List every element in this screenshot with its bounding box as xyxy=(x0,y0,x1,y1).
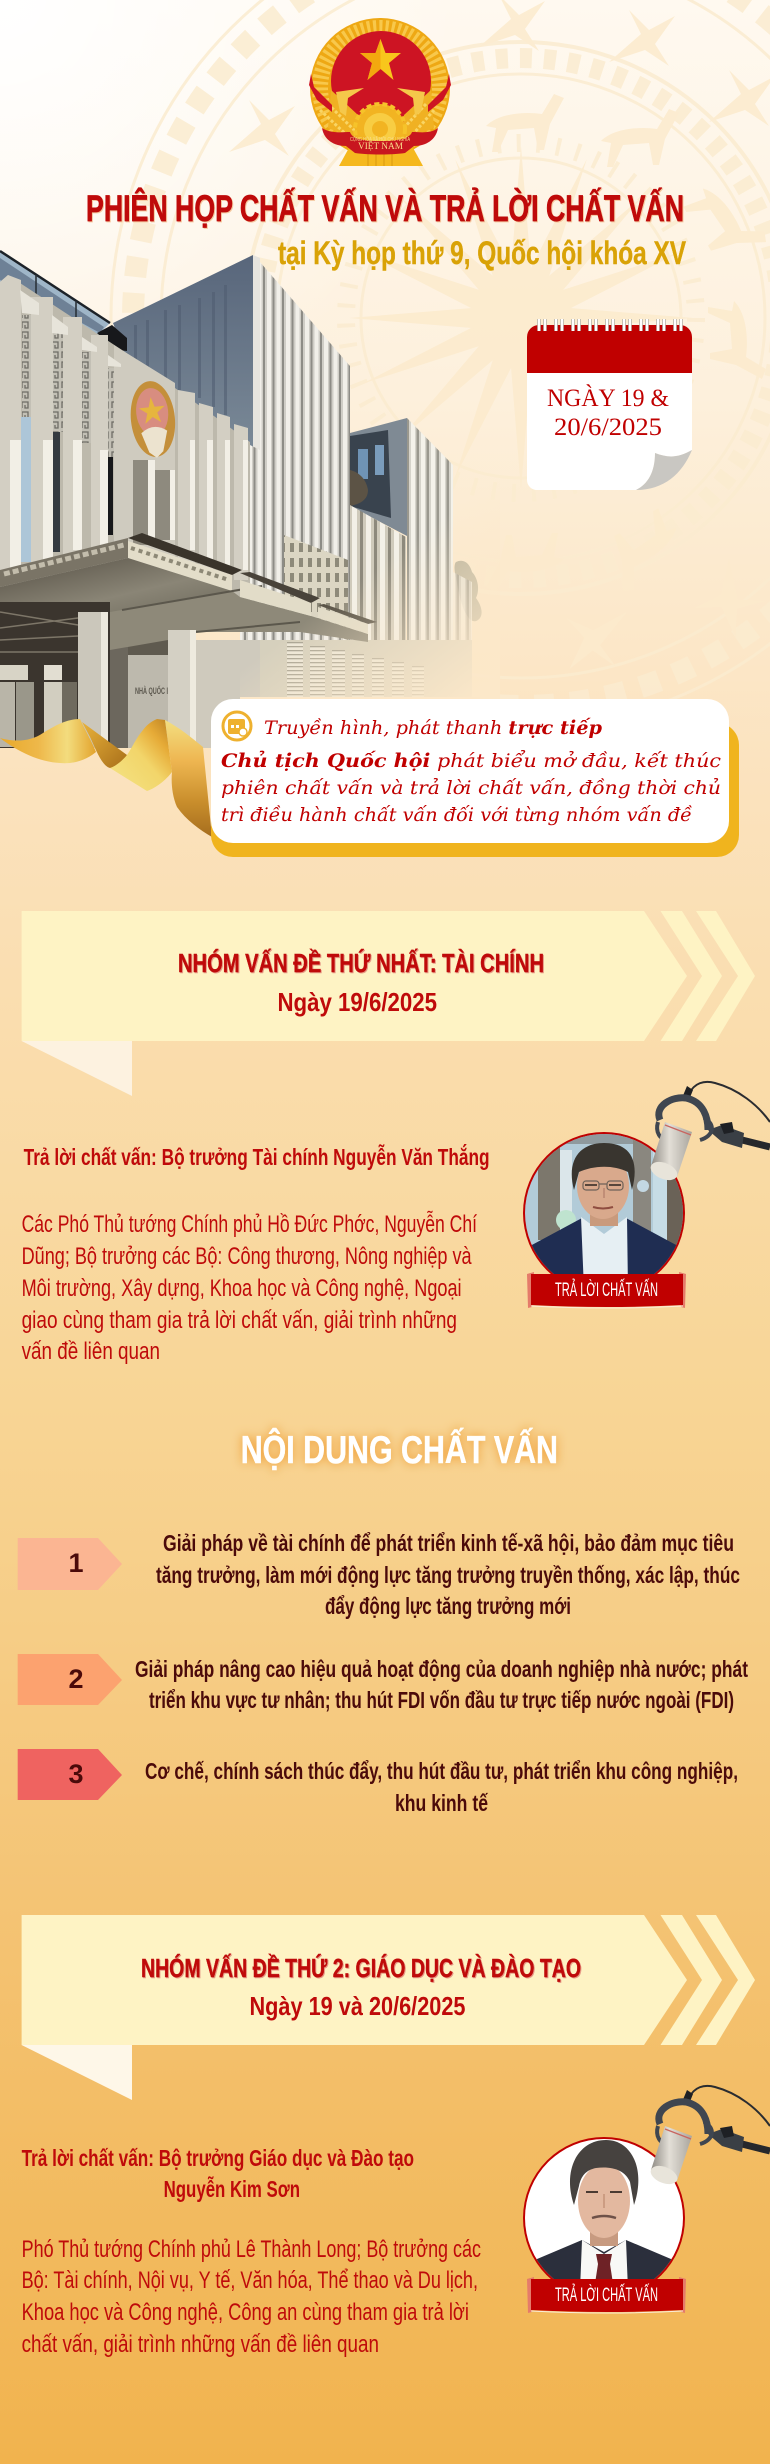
panel: group 1 banner xyxy=(22,911,755,1096)
text block: participants 2: Bộ: Tài chính, Nội vụ, Y tế, Văn hóa, Thể thao và Du lịch, xyxy=(22,2267,478,2294)
label: respondent 2 ribbon: TRẢ LỜI CHẤT VẤN xyxy=(555,2284,658,2306)
canopy left xyxy=(128,533,242,575)
pilasters xyxy=(0,275,21,600)
text block: participants 1: Các Phó Thủ tướng Chính phủ Hồ Đức Phớc, Nguyễn Chí xyxy=(22,1211,477,1238)
panel: group 2 banner xyxy=(22,1915,755,2100)
panel: group 2 banner: Ngày 19 và 20/6/2025 xyxy=(250,1991,466,2021)
text block: participants 1 xyxy=(22,1211,477,1365)
callout: live broadcast: phiên chất vấn và trả lời chất vấn, đồng thời chủ xyxy=(221,777,721,799)
portrait: Nguyễn Văn Thắng xyxy=(523,1132,685,1274)
list item 2: 2 xyxy=(68,1664,84,1694)
text block: participants 2: Phó Thủ tướng Chính phủ Lê Thành Long; Bộ trưởng các xyxy=(22,2236,481,2263)
canopy underside xyxy=(0,558,232,613)
panel: group 2 banner: NHÓM VẤN ĐỀ THỨ 2: GIÁO DỤC VÀ ĐÀO TẠO xyxy=(141,1953,581,1983)
panel: group 1 banner: Ngày 19/6/2025 xyxy=(278,987,437,1017)
calendar: 20/6/2025 xyxy=(554,414,662,441)
base with louvers xyxy=(240,640,472,700)
canopy middle and right xyxy=(240,572,320,603)
pilaster bright edges xyxy=(10,440,248,570)
gear xyxy=(355,104,405,154)
calendar: NGÀY 19 & xyxy=(547,384,669,412)
tower stripes xyxy=(240,262,350,640)
facade emblem xyxy=(127,379,179,460)
text block: participants 2: chất vấn, giải trình những vấn đề liên quan xyxy=(22,2331,379,2358)
callout: live broadcast: trì điều hành chất vấn đối với từng nhóm vấn đề xyxy=(221,804,692,826)
canopy underside right xyxy=(110,591,368,650)
list item 1 xyxy=(18,1530,740,1619)
text block: participants 2 xyxy=(22,2236,481,2358)
icon: microphone 1 xyxy=(648,1082,770,1184)
list item 3 xyxy=(18,1749,738,1816)
label: respondent 1 ribbon: TRẢ LỜI CHẤT VẤN xyxy=(555,1279,658,1301)
panel: group 1 banner: NHÓM VẤN ĐỀ THỨ NHẤT: TÀI CHÍNH xyxy=(178,948,544,978)
entrance interior xyxy=(0,602,110,748)
watermark: bronze drum pattern xyxy=(111,0,770,728)
text block: participants 1: vấn đề liên quan xyxy=(22,1338,160,1365)
text block: participants 1: giao cùng tham gia trả lời chất vấn, giải trình những xyxy=(22,1307,457,1334)
fade overlay xyxy=(240,400,500,760)
label: respondent 1 ribbon xyxy=(527,1272,686,1308)
text block: participants 1: Môi trường, Xây dựng, Khoa học và Công nghệ, Ngoại xyxy=(22,1275,462,1302)
tower front xyxy=(113,255,253,450)
list item 1: 1 xyxy=(68,1548,84,1578)
callout: live broadcast: Truyền hình, phát thanh trực tiếp xyxy=(264,717,603,739)
portrait: Nguyễn Kim Sơn xyxy=(523,2137,685,2279)
heading: respondent 2: Trả lời chất vấn: Bộ trưởng Giáo dục và Đào tạo xyxy=(22,2145,414,2171)
greek key columns xyxy=(22,315,32,417)
icon: microphone 2 xyxy=(648,2086,770,2188)
national emblem: VIỆT NAM xyxy=(358,141,403,151)
rice and ribbon sides xyxy=(309,74,332,112)
text block: participants 1: Dũng; Bộ trưởng các Bộ: Công thương, Nông nghiệp và xyxy=(22,1243,472,1270)
list item 3: khu kinh tế xyxy=(395,1790,488,1816)
calendar rings xyxy=(539,319,681,331)
icon: calendar clock xyxy=(223,712,251,740)
facade windows xyxy=(133,460,148,545)
callout: live broadcast xyxy=(211,699,739,857)
callout: live broadcast: Chủ tịch Quốc hội phát biểu mở đầu, kết thúc xyxy=(221,750,721,772)
tree xyxy=(454,561,482,621)
list item 1: đẩy động lực tăng trưởng mới xyxy=(325,1593,571,1619)
heading: respondent 1: Trả lời chất vấn: Bộ trưởng Tài chính Nguyễn Văn Thắng xyxy=(24,1143,490,1170)
mid facade window rows xyxy=(284,535,348,640)
signage: NHÀ QUỐC I xyxy=(135,685,168,696)
calendar xyxy=(527,319,692,490)
glass band xyxy=(0,251,113,352)
lower wheat xyxy=(328,90,358,140)
illustration: National Assembly building xyxy=(0,251,500,761)
base xyxy=(339,146,423,166)
pilaster returns xyxy=(20,290,39,315)
rear building xyxy=(350,418,407,536)
national emblem: CỘNG HÒA XÃ HỘI CHỦ NGHĨA xyxy=(350,136,411,143)
heading: respondent 2 xyxy=(22,2145,414,2202)
list item 3: 3 xyxy=(68,1759,84,1789)
walls behind columns xyxy=(110,613,128,748)
label: respondent 2 ribbon xyxy=(527,2277,686,2313)
heading: respondent 2: Nguyễn Kim Sơn xyxy=(164,2175,300,2202)
low stepped facade xyxy=(350,505,406,700)
columns xyxy=(78,612,108,748)
star xyxy=(360,39,401,80)
stone wing xyxy=(0,275,250,600)
motto banner xyxy=(322,128,438,154)
national emblem xyxy=(309,18,451,166)
heading: question content: NỘI DUNG CHẤT VẤN xyxy=(241,1427,558,1472)
text block: participants 2: Khoa học và Công nghệ, Công an cùng tham gia trả lời xyxy=(22,2299,469,2326)
list item 2 xyxy=(18,1654,748,1713)
gold ribbon xyxy=(0,719,212,837)
